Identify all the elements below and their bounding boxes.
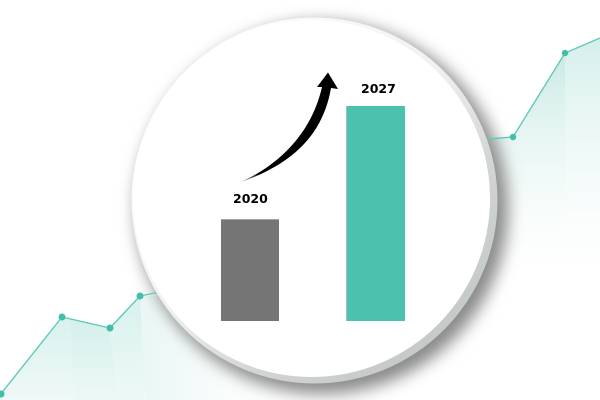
label: 2027: 2027 — [361, 81, 396, 96]
arrow: growth — [238, 72, 338, 183]
background line chart: left — [0, 292, 160, 398]
circle panel — [132, 18, 498, 384]
background chart fill: right — [488, 38, 600, 290]
label: 2020: 2020 — [233, 191, 268, 206]
circle drop shadow — [136, 22, 508, 394]
background chart fill: left — [0, 296, 300, 400]
bar: 2020 — [221, 219, 279, 321]
bar: 2027 — [346, 106, 405, 321]
background line chart: right — [488, 38, 600, 140]
